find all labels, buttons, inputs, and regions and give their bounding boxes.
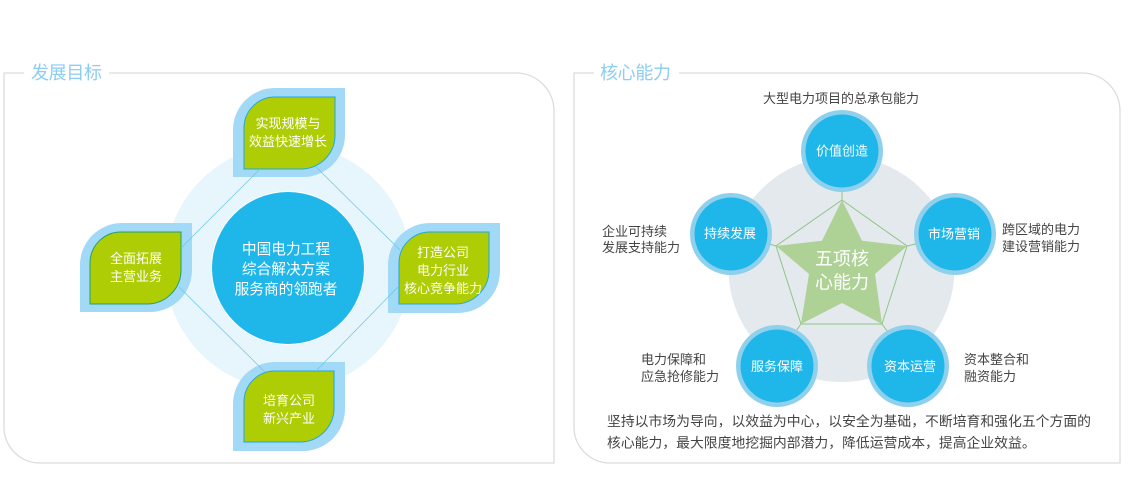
- heading: development goals: 发展目标: [31, 63, 102, 83]
- node: marketing: 市场营销: [928, 226, 980, 242]
- label: right capability: 跨区域的电力: [1002, 222, 1080, 237]
- leaf: top goal: [233, 88, 345, 177]
- leaf: right goal: 打造公司: [417, 245, 469, 260]
- leaf: left goal: 全面拓展: [110, 251, 162, 266]
- leaf: left goal: 主营业务: [110, 269, 162, 284]
- node: service assurance: 服务保障: [751, 359, 803, 374]
- node: marketing: [914, 193, 996, 275]
- node: capital operation: 资本运营: [884, 359, 936, 374]
- label: left capability: 发展支持能力: [602, 240, 680, 255]
- heading: core capabilities: 核心能力: [600, 63, 671, 83]
- node: capital operation: [867, 325, 949, 407]
- grey background circle: [728, 156, 954, 382]
- node: value creation: [801, 110, 883, 192]
- summary paragraph: 坚持以市场为导向，以效益为中心，以安全为基础，不断培育和强化五个方面的: [607, 413, 1091, 429]
- label: top capability: 大型电力项目的总承包能力: [763, 91, 919, 106]
- label: lower right capability: 资本整合和: [964, 352, 1029, 367]
- leaf: right goal: [388, 223, 500, 313]
- panel: development goals: [4, 63, 554, 463]
- star: 心能力: [815, 272, 869, 292]
- centre circle: [211, 191, 365, 345]
- centre circle: 中国电力工程: [242, 241, 330, 258]
- node: service assurance: [736, 325, 818, 407]
- centre circle: 综合解决方案: [242, 260, 330, 278]
- label: lower left capability: 应急抢修能力: [641, 369, 719, 384]
- leaf: right goal: 核心竞争能力: [404, 281, 482, 296]
- green pentagon and spokes: [766, 190, 920, 335]
- leaf: top goal: 效益快速增长: [249, 134, 327, 149]
- star: 五项核: [815, 249, 869, 269]
- leaf: bottom goal: 培育公司: [263, 393, 315, 408]
- summary paragraph: 核心能力，最大限度地挖掘内部潜力，降低运营成本，提高企业效益。: [607, 434, 1036, 450]
- centre circle: 服务商的领跑者: [235, 281, 337, 298]
- leaf: right goal: 电力行业: [417, 263, 469, 278]
- leaf: bottom goal: [233, 362, 345, 451]
- label: left capability: 企业可持续: [602, 224, 667, 239]
- leaf: left goal: [80, 223, 192, 312]
- label: lower left capability: 电力保障和: [641, 352, 706, 367]
- label: right capability: 建设营销能力: [1002, 239, 1080, 254]
- node: sustainable development: [690, 193, 772, 275]
- label: lower right capability: 融资能力: [964, 369, 1016, 384]
- star: [776, 200, 907, 324]
- light background circle: [165, 144, 411, 390]
- panel: core capabilities: [574, 63, 1120, 463]
- leaf: bottom goal: 新兴产业: [263, 411, 315, 426]
- node: sustainable development: 持续发展: [704, 226, 756, 241]
- leaf: top goal: 实现规模与: [255, 116, 321, 131]
- connector lines: [179, 167, 400, 372]
- node: value creation: 价值创造: [816, 144, 868, 158]
